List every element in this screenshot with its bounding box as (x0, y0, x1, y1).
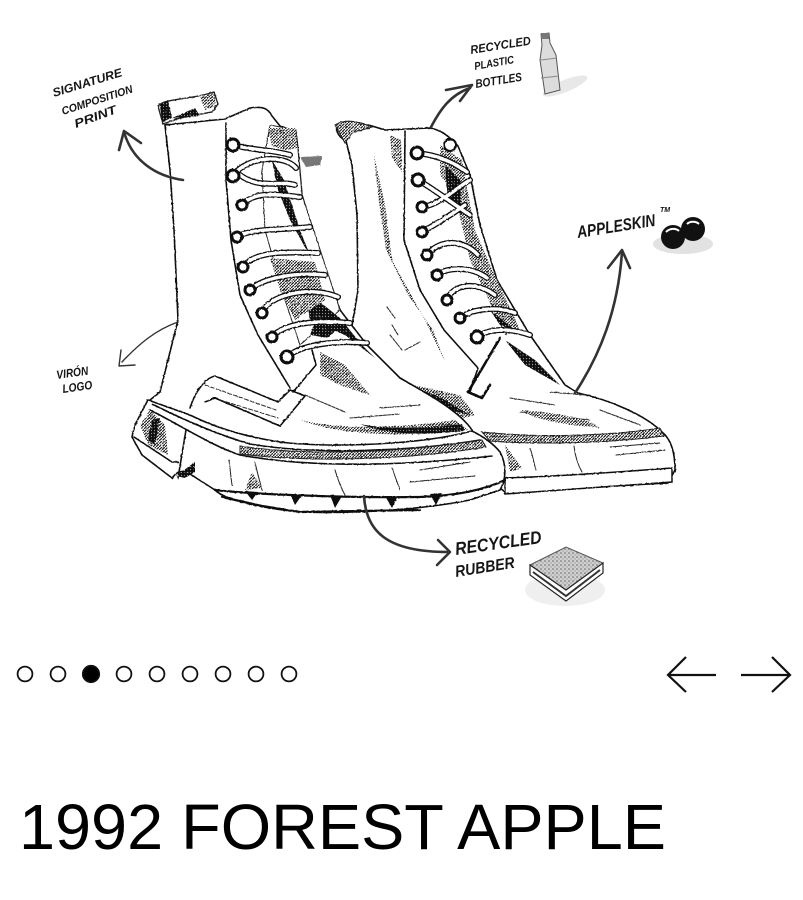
arrow: signature composition print (119, 131, 183, 180)
icon: rubber swatch (525, 547, 605, 606)
label: viron logo (55, 363, 94, 396)
label: viron logo: VIRÓN (55, 363, 89, 382)
label: recycled rubber: RUBBER (454, 555, 516, 581)
label: recycled rubber: RECYCLED (454, 527, 543, 559)
arrow: recycled plastic bottles (431, 85, 472, 127)
label: appleskin: APPLESKIN (575, 211, 657, 242)
title: 1992 FOREST APPLE (19, 791, 666, 863)
label: recycled plastic bottles: PLASTIC (473, 54, 516, 73)
icon: plastic bottle (540, 33, 590, 101)
boots illustration (132, 92, 675, 512)
left boot (132, 92, 505, 512)
arrow: recycled rubber (364, 496, 450, 565)
pagination dots (18, 666, 296, 682)
arrow: viron logo (119, 322, 178, 366)
label: signature composition print (51, 65, 135, 131)
left boot tongue and laces (227, 125, 375, 392)
right boot laces (411, 139, 530, 398)
label: appleskin: TM (660, 207, 670, 214)
left boot vamp shading (300, 352, 468, 434)
arrow: appleskin (575, 250, 630, 393)
left boot upper (150, 107, 476, 450)
right boot (335, 121, 675, 494)
left boot seam (226, 123, 290, 388)
left boot sole (132, 400, 505, 512)
label: viron logo: LOGO (61, 378, 94, 396)
fleck beside left boot (300, 156, 322, 167)
right boot sole (482, 428, 672, 494)
arrow: previous (668, 657, 716, 692)
left boot pull tab (158, 92, 218, 124)
label: recycled plastic bottles (469, 34, 532, 91)
label: recycled plastic bottles: RECYCLED (469, 34, 532, 57)
label: signature composition print: COMPOSITION (60, 83, 135, 118)
right boot shading (374, 135, 640, 428)
right boot upper (337, 121, 675, 492)
label: signature composition print: SIGNATURE (51, 65, 125, 100)
left boot overlay stitching (190, 376, 305, 426)
label: signature composition print: PRINT (72, 102, 120, 131)
arrow: next (741, 657, 790, 692)
icon: apples (653, 217, 713, 254)
right boot collar (335, 121, 372, 143)
right boot seam (404, 131, 478, 392)
label: recycled rubber (454, 527, 543, 581)
label: recycled plastic bottles: BOTTLES (474, 70, 523, 91)
